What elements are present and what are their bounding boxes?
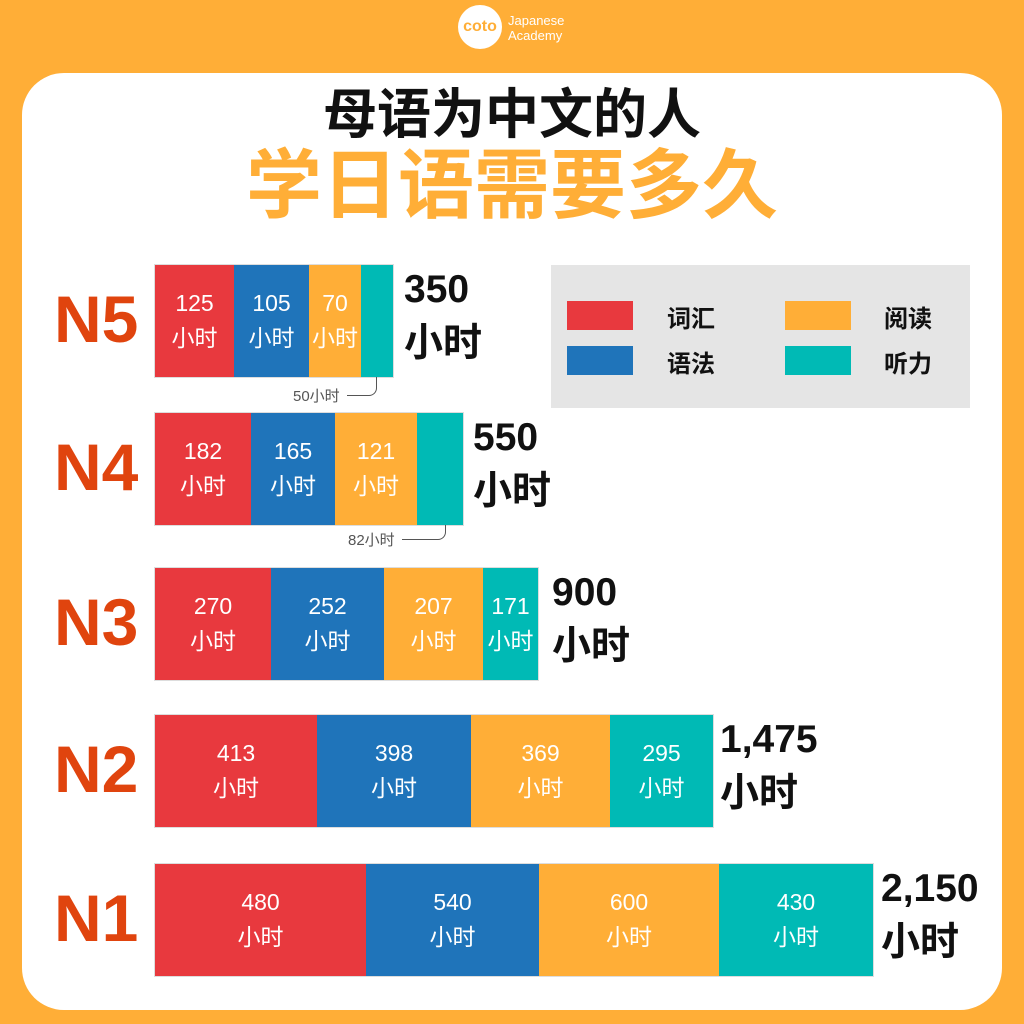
- title line 1: 母语为中文的人: [323, 85, 701, 145]
- text: 369: [521, 740, 560, 766]
- logo: coto: [463, 18, 497, 35]
- text: 小时: [353, 473, 399, 499]
- text: 小时: [473, 470, 551, 513]
- text: 小时: [881, 921, 959, 964]
- text: 350: [404, 268, 469, 311]
- note 82: 82小时: [348, 532, 395, 549]
- text: 413: [217, 740, 255, 766]
- text: 小时: [190, 628, 236, 654]
- logo: Academy: [508, 28, 562, 43]
- note 82: [348, 525, 446, 549]
- text: 125: [175, 290, 214, 316]
- text: 70: [322, 290, 348, 316]
- text: 小时: [720, 772, 798, 815]
- text: 295: [642, 740, 681, 766]
- text: 2,150: [881, 867, 979, 910]
- title line 2: 学日语需要多久: [246, 144, 778, 229]
- text: 小时: [371, 775, 417, 801]
- text: 480: [241, 889, 280, 915]
- text: 171: [491, 593, 530, 619]
- text: 小时: [488, 628, 534, 654]
- text: 小时: [606, 924, 652, 950]
- legend: 阅读: [884, 306, 932, 333]
- text: 430: [777, 889, 815, 915]
- legend: 语法: [667, 351, 715, 378]
- note 50: 50小时: [293, 388, 340, 405]
- text: 小时: [304, 628, 350, 654]
- text: 207: [414, 593, 453, 619]
- text: 小时: [213, 775, 259, 801]
- legend: 听力: [884, 351, 932, 378]
- text: 121: [357, 438, 395, 464]
- text: 182: [184, 438, 222, 464]
- note 50: [293, 377, 377, 405]
- text: 550: [473, 416, 538, 459]
- text: 小时: [773, 924, 819, 950]
- text: 小时: [312, 325, 358, 351]
- logo: Japanese: [508, 13, 564, 28]
- text: 105: [252, 290, 291, 316]
- text: 小时: [172, 325, 218, 351]
- legend: 词汇: [667, 306, 715, 333]
- text: 270: [194, 593, 232, 619]
- N5: N5: [54, 282, 138, 356]
- N4: N4: [54, 430, 138, 504]
- text: 540: [433, 889, 472, 915]
- legend: [551, 265, 970, 408]
- text: 252: [308, 593, 347, 619]
- logo: [458, 5, 564, 49]
- N2: N2: [54, 732, 138, 806]
- text: 1,475: [720, 718, 818, 761]
- text: 小时: [410, 628, 456, 654]
- text: 小时: [518, 775, 564, 801]
- N3: N3: [54, 585, 138, 659]
- text: 小时: [638, 775, 684, 801]
- text: 600: [610, 889, 648, 915]
- text: 165: [274, 438, 312, 464]
- text: 小时: [552, 625, 630, 668]
- text: 小时: [248, 325, 294, 351]
- text: 398: [375, 740, 413, 766]
- text: 小时: [404, 322, 482, 365]
- text: 小时: [270, 473, 316, 499]
- text: 小时: [238, 924, 284, 950]
- text: 900: [552, 571, 617, 614]
- text: 小时: [430, 924, 476, 950]
- text: 小时: [180, 473, 226, 499]
- N1: N1: [54, 881, 138, 955]
